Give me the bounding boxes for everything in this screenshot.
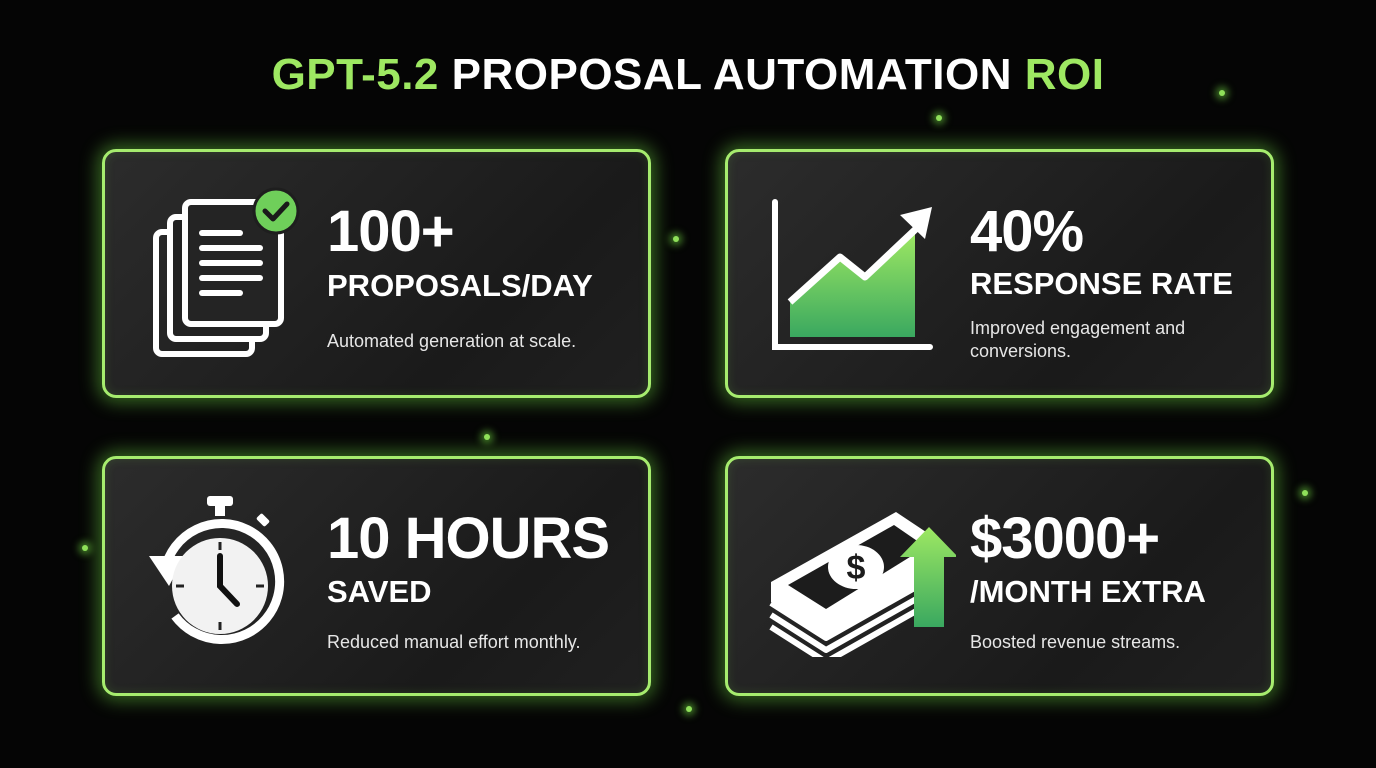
icon: growth chart — [772, 199, 933, 350]
panel: response rate: RESPONSE RATE — [970, 266, 1233, 301]
panel: hours saved — [102, 456, 651, 696]
panel: proposals — [102, 149, 651, 398]
icon: money with arrow: $ — [847, 549, 866, 587]
panel: response rate: 40% — [970, 199, 1083, 264]
panel: revenue: $3000+ — [970, 506, 1159, 571]
panel: response rate: conversions. — [970, 341, 1071, 361]
panel: proposals: PROPOSALS/DAY — [327, 268, 593, 303]
panel: revenue — [725, 456, 1274, 696]
icon: money with arrow — [770, 512, 956, 657]
panel: proposals: 100+ — [327, 199, 454, 264]
icon: stopwatch — [149, 496, 284, 644]
title: GPT-5.2 PROPOSAL AUTOMATION ROI — [272, 50, 1104, 99]
panel: hours saved: Reduced manual effort monthly. — [327, 632, 580, 652]
panel: hours saved: 10 HOURS — [327, 506, 609, 571]
panel: proposals: Automated generation at scale. — [327, 331, 576, 351]
panel: hours saved: SAVED — [327, 574, 432, 609]
panel: response rate — [725, 149, 1274, 398]
panel: revenue: /MONTH EXTRA — [970, 574, 1206, 609]
panel: revenue: Boosted revenue streams. — [970, 632, 1180, 652]
panel: response rate: Improved engagement and — [970, 318, 1185, 338]
icon: documents — [153, 188, 296, 357]
